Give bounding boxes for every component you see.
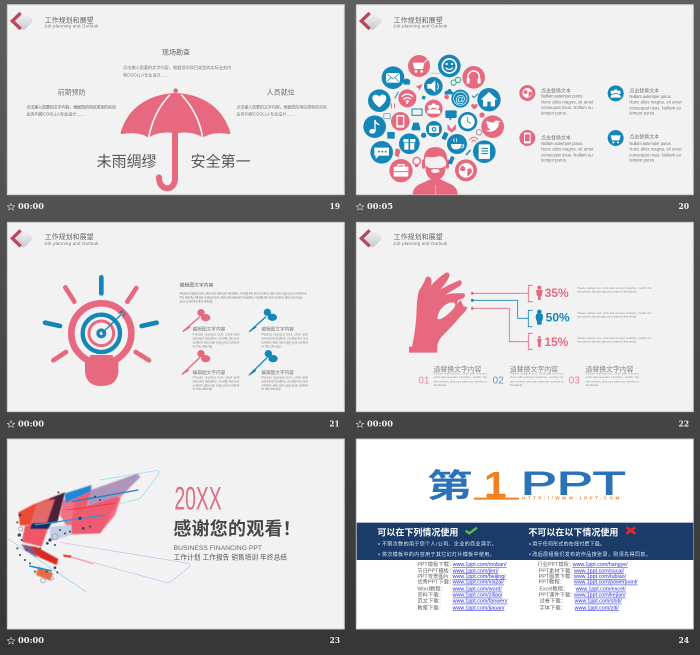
stat 15% [537,335,652,349]
link list right: PPT图表下载： [539,572,576,580]
small floating icons [384,73,485,167]
stat 15%: Please replace text, click add relevant headline, modify the [577,337,652,340]
numbered item 02: this directly. [510,384,523,387]
numbered item 03: 请替换文字内容 [585,364,634,373]
text: staffing body: 点击输入您要的文字内容，根据您的项目类型的实际 [236,104,327,110]
text: prevention body [26,104,116,116]
link list right: Excel教程： [539,585,568,593]
slide 22 footer [356,418,689,428]
navy band [357,523,693,560]
navy band: 将次模板中的内容用于其它幻灯片模板中使用。 [382,551,495,558]
slide 20 subtitle: Job planning and Outlook [393,24,448,29]
feature item 3: tempor purus. [541,158,567,163]
link list right: www.1ppt.com/kejian/ [574,593,626,599]
link list left: www.1ppt.com/jieri/ [453,568,499,574]
slide 24: 1ppt promo [356,439,693,645]
dart item 2: 编辑图文字内容 [261,325,294,332]
numbered item 02: Please replace text, click add relevant [510,372,564,375]
icon: bulb with dartboard [45,277,157,386]
text: intro paragraph [180,292,307,304]
text: intro paragraph: this directly. Please replace text, click add relevant headline, modify the text content, also can copy [180,296,303,300]
text: prevention body: 点击输入您要的文字内容，根据您的项目类型的实际 [26,104,116,110]
link list left: www.1ppt.com/jiaoan/ [453,605,505,611]
heading: site survey: 现场勘查 [162,47,190,56]
slide 22 subtitle: Job planning and Outlook [393,241,448,246]
slide 19 corner logo [12,10,34,31]
link list left: www.1ppt.com/word/ [453,587,502,593]
feature item 4: 点击替换文本 [629,134,659,141]
dart item 2: relevant headline, modify the text [261,336,308,340]
dart item 4: relevant headline, modify the text [261,379,308,383]
icon: briefcase [389,159,413,182]
numbered item 02: click add relevant headline, modify the [510,376,564,379]
slide 20 footer [356,201,689,211]
feature item 1 [519,85,594,115]
icon: bird [481,115,504,138]
slide 21 footer [7,418,340,428]
feature item 1: tempor purus. [541,110,567,115]
dart item 3: Please replace text, click add [193,376,240,380]
icon: phone [391,112,410,131]
feature item 4: Nunc aliss magna, sit amet [629,147,683,152]
link list left: 节日PPT模板： [417,566,454,574]
numbered item 03: text content, also can copy your content to [586,380,640,383]
slide 22 corner logo [361,228,383,248]
navy band: 不可以在以下情况使用 [528,526,618,537]
subtitle chinese: 工作计划 工作报告 销售培训 年终总结 [174,552,287,561]
link list right: PPT教程： [539,578,565,586]
link list left: 优秀PPT下载： [417,578,454,586]
dart item 1: 编辑图文字内容 [193,325,226,332]
navy band: 改后层组我们发布的作品按张录，则须先得同意。 [532,551,651,558]
icon: at sign [451,90,469,108]
slide 20: social icon cluster [356,5,693,211]
dart item 3: 编辑图文字内容 [193,369,226,376]
numbered item 03: Please replace text, click add relevant [586,372,639,375]
link list right: PPT素材下载： [539,566,576,574]
dart item 1: relevant headline, modify the text [193,336,239,340]
link list left: www.1ppt.com/beijing/ [453,574,506,580]
navy band: 不限次数的用于您个人/公司、企业的商业演示。 [382,541,497,548]
icon: chat [370,141,393,164]
link list right: PPT课件下载： [539,591,576,599]
link list right: www.1ppt.com/hangye/ [573,562,628,568]
logo: 第 [427,467,473,504]
link list right: www.1ppt.com/sucai/ [574,568,625,574]
link list right: 字体下载： [539,603,566,611]
icon: camera [426,121,442,137]
slide 21: light bulb target [7,222,344,428]
navy band: 可以在下列情况使用 [377,526,458,537]
numbered item 01 [418,364,488,387]
icon: gift [399,133,420,154]
link list left: www.1ppt.com/fanwen/ [453,599,508,605]
link list left [417,560,508,611]
slide 22 footer: 00:00 [367,418,393,428]
link list left: www.1ppt.com/ziliao/ [453,593,503,599]
numbered item 01: text content, also can copy your content to [434,380,488,383]
dart item 1: content, also can copy your content [193,340,239,344]
dart item 1: Please replace text, click add [193,332,240,336]
dart item 3: content, also can copy your content [193,383,239,387]
stat 35% [536,286,652,300]
heading: edit text: 编辑图文字内容 [180,282,214,289]
numbered item 01: Please replace text, click add relevant [434,372,487,375]
icon: heart [368,89,391,112]
text: intro paragraph: your content to this directly. [180,300,213,304]
slide 21 subtitle: Job planning and Outlook [44,241,99,246]
slide 22 footer: 22 [679,418,689,428]
link list left: PPT背景图片 [417,572,449,580]
icon: cup [447,134,467,154]
numbered item 03: this directly. [586,384,599,387]
link list left: PPT模板下载： [417,560,454,568]
feature item 3: consequat risus. Nullam eu [541,152,593,157]
feature item 2 [608,85,683,116]
icon: umbrella [121,88,230,188]
icon: speaker [424,77,443,96]
feature item 2: Nullam autemper purus. [629,94,672,99]
numbered item 03: 03 [569,375,580,386]
logo: HTTP://WWW.1PPT.COM [522,496,619,501]
dart item 4: 编辑图文字内容 [261,369,294,376]
connector lines [471,285,533,349]
slide 21 title: 工作规划和展望 [45,232,94,241]
stat 35%: text content, also can copy your content to this directly. [577,291,637,294]
stat 35%: 35% [545,286,569,300]
link list left: 资料下载： [417,591,444,599]
numbered item 02 [493,364,564,387]
link list left: Word教程： [417,585,446,593]
link list right: 试卷下载： [539,597,566,605]
feature item 2: consequat risus. Nullam eu [629,105,682,110]
navy band: 用于任何形式的在线付费下载。 [532,541,605,548]
dart item 3: to this directly. [193,387,213,391]
abstract wing graphic [8,471,190,592]
numbered item 01: 请替换文字内容 [433,364,482,373]
feature item 2: Nunc aliss magna, sit amet [629,100,683,105]
icon: music note [363,115,386,138]
feature item 4: consequat risus. Nullam eu [629,152,682,157]
thank you heading: 感谢您的观看！ [173,519,301,539]
icon: globe [455,159,477,181]
slide 21 footer: 00:00 [18,418,44,428]
slide 23 footer: 00:00 [18,635,44,645]
dart item 2: Please replace text, click add [261,332,308,336]
logo [427,464,626,506]
slogan left: 未雨绸缪 [97,153,157,170]
text: site survey body [123,64,231,77]
slide 20 title: 工作规划和展望 [394,15,443,24]
link list right: www.1ppt.com/tubiao/ [574,574,627,580]
dart item 2: content, also can copy your content [261,340,308,344]
dart item 1: to this directly. [193,344,213,348]
text: prevention body: 业务内容COOLLA专业设计…… [26,110,85,116]
icon: people [425,100,443,118]
numbered item 02: 02 [493,375,504,386]
year: 20XX [174,480,222,517]
text: intro paragraph: Please replace text, click add relevant headline, modify the text content, also can copy your content to [180,292,307,296]
dart item 3: relevant headline, modify the text [193,379,239,383]
link list right [537,560,638,611]
icon: notebook [473,140,496,163]
dart item 4: content, also can copy your content [261,383,308,387]
link list left: 教案下载： [417,603,444,611]
stat 15%: 15% [544,335,569,349]
text: staffing body [236,104,327,116]
link list right: www.1ppt.com/excel/ [576,587,626,593]
numbered item 02: 请替换文字内容 [510,364,558,373]
slide 19 footer [7,201,340,211]
slide 24 page number: 24 [679,635,689,645]
icon: headset person [413,147,458,195]
dart item 4: Please replace text, click add [261,376,308,380]
link list right: www.1ppt.com/ziti/ [575,605,619,611]
link list right: www.1ppt.com/powerpoint/ [574,580,638,586]
slide 23 footer: 23 [330,635,340,645]
icon: headphones [462,66,485,89]
logo: PPT [521,464,626,501]
slide 22: hand and percentages [356,222,693,428]
stat 15%: text content, also can copy your content to this directly. [577,341,637,344]
stat 50%: Please replace text, click add relevant headline, modify the [577,312,652,315]
feature item 4: tempor purus. [629,158,655,163]
slide 21 corner logo [12,228,34,248]
slide 20 footer: 20 [679,201,689,211]
subtitle english: BUSINESS FINANCING PPT [174,545,262,552]
stat 50%: 50% [546,311,570,325]
slogan right: 安全第一 [191,152,251,170]
slide 23 footer [7,635,340,645]
slide 19 title: 工作规划和展望 [45,15,94,24]
stat 35%: Please replace text, click add relevant headline, modify the [577,287,652,290]
heading: prevention: 前期预防 [58,87,86,96]
numbered item 02: text content, also can copy your content to [510,380,564,383]
feature item 1: Nullam autemper purus. [541,94,583,99]
icon cluster [363,55,504,195]
link list left: www.1ppt.com/moban/ [453,562,507,568]
dart item 3 [181,350,240,391]
heading: staffing: 人员就位 [267,87,295,96]
text: site survey body: 点击输入您要的文字内容，根据您的项目类型的实际业务内 [123,64,231,70]
dart item 2: to this directly. [261,344,281,348]
dart item 4: to this directly. [261,387,281,391]
slide 23: thank you [7,439,344,645]
feature item 1: Nunc aliss magna, sit amet [541,99,594,104]
slide 22 title: 工作规划和展望 [394,232,443,241]
stat 50% [536,310,652,325]
dart item 1 [183,309,240,348]
icon: cart [408,55,430,77]
feature item 3: 点击替换文本 [541,134,571,141]
text: staffing body: 业务内容COOLLA专业设计…… [236,110,295,116]
slide 19: umbrella [7,5,344,211]
icon: smile [438,55,461,77]
link list right: 行业PPT模板： [537,560,574,568]
slide 19 subtitle: Job planning and Outlook [44,24,99,29]
link list right: www.1ppt.com/shiti/ [575,599,622,605]
numbered item 01: click add relevant headline, modify the [434,376,488,379]
link list left: www.1ppt.com/xiazai/ [453,580,504,586]
slide 21 footer: 21 [329,418,340,428]
slide 20 corner logo [361,10,383,31]
link list left: 范文下载： [417,597,444,605]
text: site survey body: 容COOLLA专业设计…… [123,71,169,77]
feature item 1: consequat risus. Nullam eu [541,105,593,110]
slide 20 footer: 00:05 [367,201,393,211]
feature item 2: 点击替换文本 [629,88,659,95]
dart item 4 [248,350,308,391]
feature item 3 [519,130,594,163]
icon: clock [458,112,477,131]
stat 50%: text content, also can copy your content to this directly. [577,316,637,319]
feature item 4: Nullam autemper purus. [629,141,672,146]
logo: 1 [484,464,507,506]
feature item 1: 点击替换文本 [541,87,571,94]
numbered item 01: 01 [418,375,430,386]
numbered item 03 [569,364,640,387]
icon: house [477,88,501,111]
numbered item 03: click add relevant headline, modify the [586,376,640,379]
feature item 2: tempor purus. [629,111,655,116]
icon: wifi [398,89,416,107]
icon: pinching hand [409,272,467,353]
slide 19 footer: 00:00 [18,201,44,211]
dart item 2 [249,309,308,348]
numbered item 01: this directly. [434,384,447,387]
icon: at sign: @ [455,94,466,105]
feature item 3: Nunc aliss magna, sit amet [541,147,594,152]
slide 19 footer: 19 [330,201,340,211]
icon: mail [382,66,404,89]
feature item 3: Nullam autemper purus. [541,141,583,146]
feature item 4 [608,130,683,163]
